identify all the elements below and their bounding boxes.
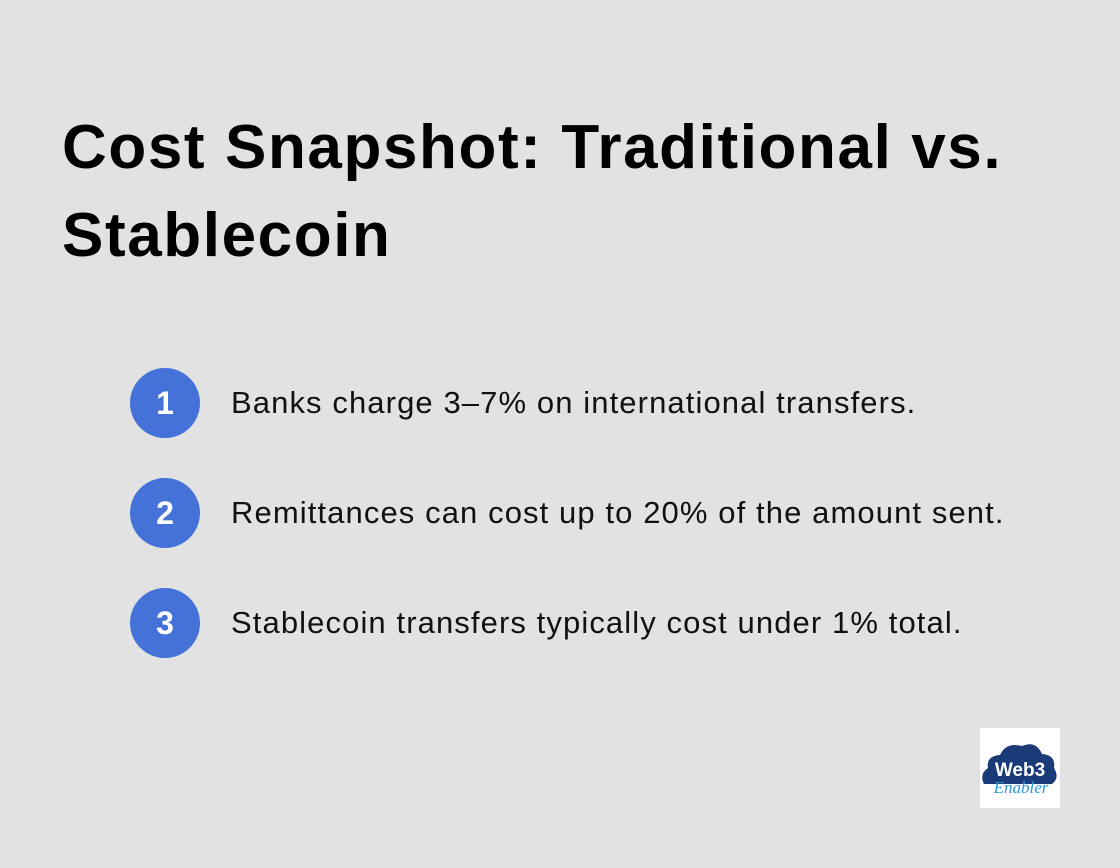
text 3: Stablecoin transfers typically cost under 1% total. bbox=[231, 605, 963, 640]
number badge 2: 2 bbox=[156, 495, 174, 531]
number badge 3 bbox=[130, 588, 200, 658]
number badge 1: 1 bbox=[156, 385, 174, 421]
number badge 3: 3 bbox=[156, 605, 174, 641]
title bbox=[62, 113, 1002, 270]
logo: Web3 Enabler bbox=[980, 728, 1060, 808]
text 1: Banks charge 3–7% on international transfers. bbox=[231, 385, 916, 420]
text 2: Remittances can cost up to 20% of the amount sent. bbox=[231, 495, 1005, 530]
logo: Web3 Enabler: Enabler bbox=[993, 778, 1049, 797]
title: Stablecoin bbox=[62, 201, 392, 270]
number badge 1 bbox=[130, 368, 200, 438]
list item 2 bbox=[130, 478, 1005, 548]
list item 3 bbox=[130, 588, 963, 658]
list item 1 bbox=[130, 368, 916, 438]
title: Cost Snapshot: Traditional vs. bbox=[62, 113, 1002, 182]
logo: Web3 Enabler: Web3 bbox=[995, 760, 1045, 781]
number badge 2 bbox=[130, 478, 200, 548]
